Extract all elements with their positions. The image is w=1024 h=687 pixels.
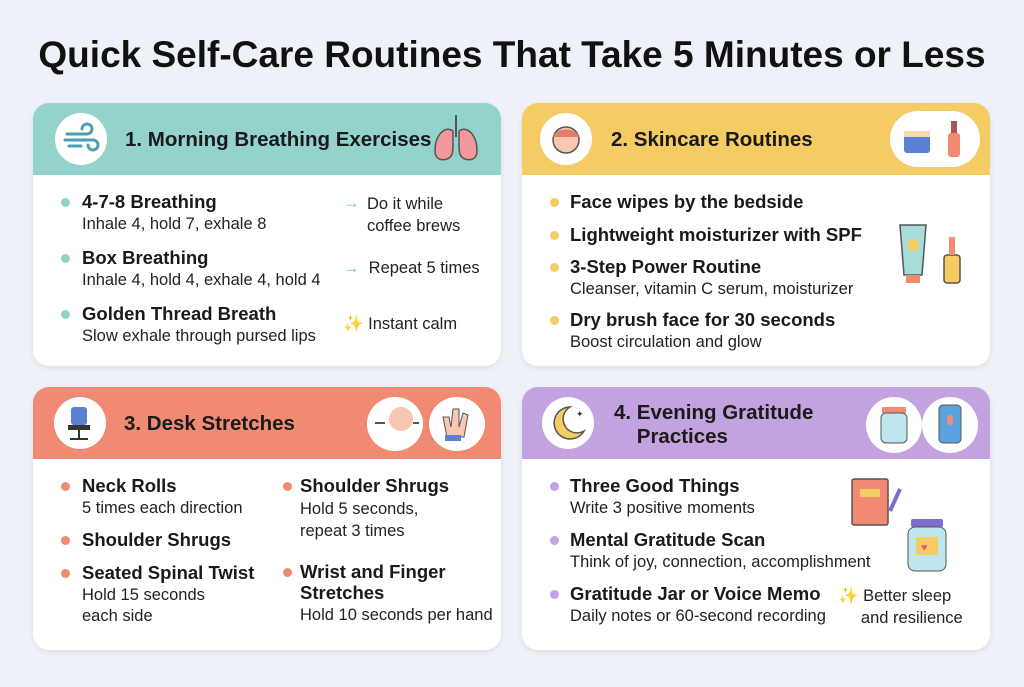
icon: tube and dropper <box>899 224 961 284</box>
item: mental scan <box>550 529 871 571</box>
item: spinal twist <box>61 562 254 625</box>
note: better sleep: ✨ Better sleep <box>838 587 951 605</box>
panel: morning breathing: Inhale 4, hold 7, exhale 8 <box>82 215 266 233</box>
panel: morning breathing <box>33 103 501 366</box>
panel: evening gratitude: Write 3 positive moments <box>570 499 755 517</box>
header title <box>614 401 813 448</box>
header title: 4. Evening Gratitude <box>614 401 813 424</box>
item: moisturizer <box>550 224 862 245</box>
panel: morning breathing: Do it while <box>367 195 443 213</box>
panel: morning breathing: Slow exhale through pursed lips <box>82 327 316 345</box>
panel: skincare: Lightweight moisturizer with SPF <box>570 224 862 245</box>
panel: skincare <box>522 103 990 366</box>
panel: desk stretches: Stretches <box>300 582 384 603</box>
header title: 1. Morning Breathing Exercises <box>125 128 431 151</box>
icon: lungs <box>434 115 478 160</box>
icon: book and jar <box>851 478 946 572</box>
panel: skincare: Face wipes by the bedside <box>570 191 803 212</box>
item: golden thread <box>61 303 316 345</box>
panel: desk stretches: Hold 10 seconds per hand <box>300 606 493 624</box>
note: better sleep: and resilience <box>861 609 963 627</box>
panel: desk stretches: Seated Spinal Twist <box>82 562 254 583</box>
panel: desk stretches: Hold 5 seconds, <box>300 500 418 518</box>
panel: morning breathing: Inhale 4, hold 4, exhale 4, hold 4 <box>82 271 321 289</box>
item: jar or memo <box>550 583 826 625</box>
item: wipes <box>550 191 803 212</box>
panel: evening gratitude: Three Good Things <box>570 475 740 496</box>
header: skincare <box>522 103 990 175</box>
panel: desk stretches: Shoulder Shrugs <box>300 475 449 496</box>
icon: wind <box>55 113 107 165</box>
header title: 3. Desk Stretches <box>124 412 295 435</box>
panel: desk stretches: 5 times each direction <box>82 499 242 517</box>
icon: moon: ✦ <box>576 409 584 419</box>
icon: jar and phone <box>866 397 978 453</box>
note: coffee: → <box>343 194 360 212</box>
header: gratitude <box>522 387 990 459</box>
icon: chair <box>54 397 106 449</box>
note: better sleep <box>838 586 963 627</box>
header title: 2. Skincare Routines <box>611 128 813 151</box>
panel: desk stretches: repeat 3 times <box>300 522 405 540</box>
panel: desk stretches: Wrist and Finger <box>300 561 446 582</box>
item: 4-7-8 <box>61 191 266 233</box>
icon: book and jar: ♥ <box>921 542 928 554</box>
item: shoulder shrugs 2 <box>283 475 449 540</box>
item: three good things <box>550 475 755 517</box>
panel: skincare: Boost circulation and glow <box>570 333 762 351</box>
header: breathing <box>33 103 501 175</box>
header: desk <box>33 387 501 459</box>
item: shoulder shrugs <box>61 529 231 550</box>
panel: morning breathing: 4-7-8 Breathing <box>82 191 217 212</box>
icon: moon <box>542 397 594 449</box>
panel: desk stretches: each side <box>82 607 153 625</box>
panel: desk stretches <box>33 387 501 650</box>
panel: desk stretches: Neck Rolls <box>82 475 177 496</box>
panel: morning breathing: coffee brews <box>367 217 460 235</box>
panel: evening gratitude: Daily notes or 60-second recording <box>570 607 826 625</box>
item: wrist <box>283 561 493 624</box>
item: neck rolls <box>61 475 242 517</box>
panel: evening gratitude: Gratitude Jar or Voice Memo <box>570 583 820 604</box>
header title: Practices <box>637 425 728 448</box>
panel: evening gratitude: Think of joy, connection, accomplishment <box>570 553 871 571</box>
item: box <box>61 247 321 289</box>
panel: desk stretches: Shoulder Shrugs <box>82 529 231 550</box>
panel: morning breathing: Box Breathing <box>82 247 208 268</box>
panel: skincare: Cleanser, vitamin C serum, moisturizer <box>570 280 853 298</box>
title: Quick Self-Care Routines That Take 5 Minutes or Less <box>38 34 986 75</box>
note: repeat: → Repeat 5 times <box>343 259 480 277</box>
panel: morning breathing: Golden Thread Breath <box>82 303 276 324</box>
panel: skincare: 3-Step Power Routine <box>570 256 761 277</box>
icon: neck and hand <box>367 397 485 451</box>
note: calm: ✨ Instant calm <box>343 315 457 333</box>
panel: desk stretches: Hold 15 seconds <box>82 586 205 604</box>
item: 3-step <box>550 256 854 298</box>
panel: evening gratitude <box>522 387 990 650</box>
icon: face <box>540 113 592 165</box>
item: dry brush <box>550 309 835 351</box>
panel: evening gratitude: Mental Gratitude Scan <box>570 529 765 550</box>
panel: skincare: Dry brush face for 30 seconds <box>570 309 835 330</box>
icon: products <box>890 111 980 167</box>
